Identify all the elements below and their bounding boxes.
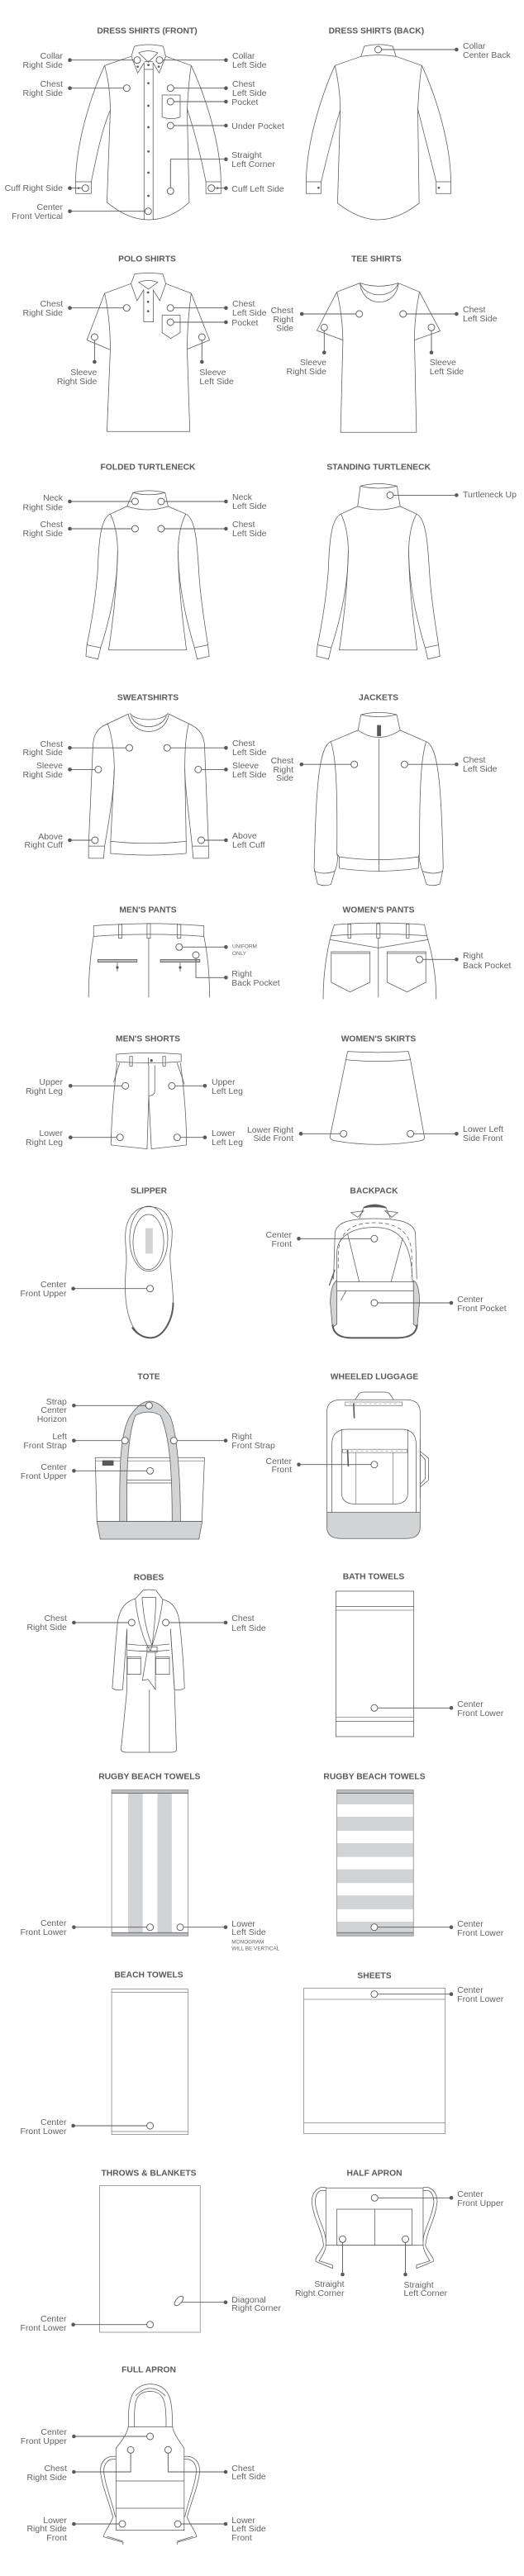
callout: diagonal right corner	[173, 2294, 281, 2313]
icon: slipper	[125, 1206, 173, 1338]
callout: center front upper	[20, 1280, 154, 1299]
callout: center front: Front	[271, 1239, 292, 1249]
callout: lower right leg: Right Leg	[26, 1138, 63, 1148]
callout: cuff left side	[208, 184, 284, 194]
panel: tote	[21, 1372, 275, 1539]
callout: straight left corner	[402, 2236, 448, 2298]
callout: collar right side: Right Side	[23, 60, 63, 70]
callout: sleeve right side: Sleeve	[70, 368, 97, 378]
callout: lower left side front	[174, 2516, 266, 2543]
callout: left front strap: Front Strap	[23, 1441, 67, 1451]
callout: center front lower: Front Lower	[457, 1994, 504, 2004]
callout: lower right side front: Right Side	[26, 2524, 67, 2534]
callout: center front: Center	[265, 1230, 293, 1240]
callout: chest left side: Chest	[463, 755, 486, 765]
callout: lower left side: Left Side	[231, 1927, 266, 1937]
callout: strap center horizon: Horizon	[37, 1414, 67, 1424]
callout: chest right side: Chest	[44, 2464, 67, 2474]
callout: lower left side front: Lower Left	[463, 1124, 503, 1134]
callout: neck left side	[158, 492, 267, 511]
callout: chest left side: Chest	[231, 2464, 255, 2474]
callout: strap center horizon	[37, 1397, 152, 1424]
callout: chest right side: Right	[273, 315, 293, 325]
callout: right front strap: Front Strap	[231, 1441, 275, 1451]
callout: above right cuff: Above	[38, 832, 63, 842]
panel: standing turtleneck	[317, 463, 517, 659]
callout: neck right side: Neck	[43, 493, 64, 503]
note: monogram will be vertical: MONOGRAM	[231, 1940, 264, 1946]
callout: right front strap	[170, 1432, 275, 1451]
icon: sheet	[304, 1989, 445, 2134]
callout: right back pocket	[193, 952, 280, 988]
callout: center front lower: Center	[40, 2314, 67, 2324]
heading: dress shirts back: DRESS SHIRTS (BACK)	[329, 26, 424, 36]
callout: uniform only	[176, 943, 257, 957]
callout: chest right side: Chest	[40, 299, 63, 309]
callout: chest right side: Chest	[40, 79, 63, 89]
heading: women's skirts: WOMEN'S SKIRTS	[341, 1034, 416, 1043]
callout: chest left side	[164, 739, 267, 758]
callout: under pocket	[167, 121, 284, 131]
heading: tee shirts: TEE SHIRTS	[351, 255, 402, 264]
callout: neck right side: Right Side	[23, 502, 63, 512]
garment: standing turtleneck	[317, 483, 440, 659]
callout: pocket	[167, 318, 258, 328]
callout: center front lower: Front Lower	[20, 1927, 67, 1937]
callout: lower left side front: Left Side	[231, 2524, 266, 2534]
callout: center front upper	[21, 1462, 154, 1481]
garment: tee shirt	[317, 283, 441, 432]
callout: upper right leg	[26, 1077, 129, 1096]
callout: chest left side	[400, 305, 498, 324]
callout: center front upper: Front Upper	[20, 1289, 67, 1299]
icon: backpack	[329, 1205, 420, 1338]
heading: jackets: JACKETS	[359, 693, 398, 702]
callout: sleeve left side: Left Side	[199, 377, 234, 387]
callout: pocket: Pocket	[231, 97, 258, 107]
callout: chest left side	[164, 2446, 266, 2482]
panel: sweatshirts	[23, 693, 267, 858]
callout: upper left leg	[169, 1077, 243, 1096]
icon: throw blanket	[100, 2186, 200, 2332]
callout: center front upper: Front Upper	[21, 2436, 67, 2446]
heading: polo shirts: POLO SHIRTS	[118, 255, 176, 264]
callout: chest right side: Chest	[271, 306, 293, 316]
callout: neck right side	[23, 493, 138, 512]
callout: right back pocket: Right	[463, 951, 484, 961]
callout: center front upper: Front Upper	[21, 1471, 67, 1481]
callout: chest right side: Chest	[40, 520, 63, 530]
icon: bath towel	[336, 1591, 414, 1737]
garment: men's pants	[88, 924, 210, 997]
callout: collar right side: Collar	[40, 51, 63, 61]
callout: chest right side: Right Side	[23, 529, 63, 539]
panel: women's skirts	[247, 1034, 503, 1144]
callout: chest left side: Left Side	[232, 88, 267, 98]
callout: upper left leg: Left Leg	[212, 1086, 243, 1096]
callout: center front: Center	[265, 1457, 293, 1466]
callout: chest right side: Right Side	[23, 748, 63, 758]
callout: sleeve left side: Sleeve	[430, 358, 456, 368]
garment: dress shirt front	[75, 45, 221, 220]
callout: chest right side	[271, 756, 358, 783]
callout: chest left side: Left Side	[463, 764, 498, 774]
heading: half apron: HALF APRON	[346, 2170, 403, 2179]
callout: center front upper: Front Upper	[457, 2198, 504, 2208]
callout: chest left side: Chest	[231, 1614, 255, 1623]
panel: sheets	[304, 1972, 504, 2134]
callout: lower left side front	[407, 1124, 503, 1143]
panel: men's shorts	[26, 1034, 243, 1149]
callout: lower right side front: Lower Right	[247, 1125, 293, 1135]
panel: folded turtleneck	[23, 463, 267, 659]
callout: straight left corner	[167, 150, 275, 194]
garment: folded turtleneck	[86, 491, 209, 659]
callout: left front strap: Left	[52, 1432, 67, 1442]
callout: straight left corner: Left Corner	[403, 2288, 448, 2298]
callout: straight left corner: Straight	[403, 2280, 434, 2290]
icon: rugby towel with vertical stripes	[112, 1790, 188, 1936]
callout: pocket	[167, 97, 258, 107]
heading: rugby beach towels: RUGBY BEACH TOWELS	[323, 1773, 426, 1782]
callout: center front: Front	[271, 1465, 292, 1475]
callout: chest right side	[26, 2446, 134, 2483]
heading: rugby beach towels: RUGBY BEACH TOWELS	[98, 1773, 201, 1782]
heading: dress shirts front: DRESS SHIRTS (FRONT)	[97, 26, 198, 36]
callout: center front	[265, 1457, 378, 1475]
callout: center front upper: Center	[40, 1280, 67, 1290]
callout: collar right side	[23, 51, 141, 70]
callout: center front lower	[371, 1985, 504, 2004]
callout: center front upper	[21, 2427, 154, 2446]
panel: full apron	[21, 2366, 266, 2545]
garment: men's shorts	[111, 1053, 187, 1149]
callout: chest right side: Chest	[40, 739, 63, 749]
panel: rugby beach towels horizontal stripes	[323, 1773, 504, 1938]
callout: above left cuff: Above	[232, 831, 257, 841]
callout: chest right side	[23, 739, 132, 758]
callout: chest left side: Left Side	[463, 314, 498, 324]
heading: bath towels: BATH TOWELS	[343, 1573, 404, 1582]
callout: chest left side: Chest	[232, 299, 255, 309]
callout: lower right side front: Side Front	[254, 1134, 293, 1143]
callout: straight right corner: Right Corner	[295, 2288, 345, 2298]
callout: diagonal right corner: Right Corner	[231, 2303, 281, 2313]
callout: chest right side: Right Side	[26, 1623, 67, 1633]
heading: robes: ROBES	[134, 1574, 164, 1583]
icon: wheeled luggage	[327, 1392, 428, 1538]
callout: chest left side: Left Side	[232, 748, 267, 758]
callout: sleeve right side: Right Side	[287, 367, 326, 377]
panel: throws and blankets	[20, 2170, 281, 2333]
callout: above left cuff	[198, 831, 265, 850]
callout: sleeve right side	[23, 761, 102, 780]
heading: slipper: SLIPPER	[131, 1186, 168, 1195]
callout: upper left leg: Upper	[212, 1077, 236, 1087]
callout: chest right side	[271, 306, 363, 334]
callout: center front vertical: Center	[36, 202, 64, 212]
callout: center front vertical	[12, 202, 151, 221]
callout: chest left side: Chest	[232, 79, 255, 89]
callout: chest right side: Side	[276, 324, 293, 334]
heading: beach towels: BEACH TOWELS	[114, 1971, 183, 1980]
callout: sleeve left side: Sleeve	[199, 368, 226, 378]
callout: lower right leg	[26, 1129, 123, 1148]
icon: tote bag	[95, 1401, 204, 1539]
callout: above left cuff: Left Cuff	[232, 840, 265, 850]
garment: women's pants	[323, 923, 436, 999]
callout: turtleneck up: Turtleneck Up	[463, 490, 517, 500]
callout: chest right side	[26, 1614, 135, 1633]
callout: chest left side	[163, 1614, 266, 1633]
callout: center front lower: Center	[40, 1918, 67, 1928]
callout: sleeve left side: Left Side	[232, 770, 267, 780]
callout: chest right side: Right Side	[23, 308, 63, 318]
heading: sweatshirts: SWEATSHIRTS	[117, 693, 179, 702]
callout: lower right side front: Lower	[43, 2516, 67, 2526]
callout: center front lower: Center	[40, 2117, 67, 2127]
panel: half apron	[295, 2170, 504, 2298]
callout: straight left corner: Straight	[231, 150, 262, 160]
callout: under pocket: Under Pocket	[231, 121, 284, 131]
panel: men's pants	[88, 905, 280, 997]
callout: right back pocket: Right	[231, 969, 252, 979]
callout: sleeve right side	[57, 334, 98, 387]
callout: chest left side	[167, 79, 267, 98]
callout: center front lower	[20, 2314, 154, 2333]
garment: polo shirt	[87, 273, 210, 431]
heading: sheets: SHEETS	[357, 1972, 392, 1981]
callout: center front pocket: Center	[457, 1295, 484, 1305]
icon: beach towel	[112, 1989, 188, 2135]
callout: chest right side	[23, 299, 130, 318]
callout: lower left leg	[174, 1129, 243, 1148]
callout: sleeve right side	[287, 324, 327, 377]
callout: lower right side front: Front	[46, 2533, 67, 2543]
callout: upper right leg: Right Leg	[26, 1086, 63, 1096]
callout: center front lower: Front Lower	[457, 1928, 504, 1938]
panel: wheeled luggage	[265, 1372, 428, 1538]
callout: center front lower	[20, 1918, 154, 1937]
callout: sleeve left side	[195, 761, 267, 780]
callout: right back pocket	[417, 951, 511, 971]
callout: neck left side: Neck	[232, 492, 253, 502]
heading: throws and blankets: THROWS & BLANKETS	[102, 2170, 197, 2179]
callout: lower left leg: Left Leg	[212, 1138, 243, 1148]
callout: collar left side: Left Side	[232, 60, 267, 70]
garment: dress shirt back	[306, 45, 451, 220]
callout: straight right corner: Straight	[314, 2279, 345, 2289]
callout: collar left side: Collar	[232, 51, 255, 61]
panel: dress shirts front	[5, 26, 284, 221]
callout: sleeve right side: Sleeve	[300, 358, 326, 368]
callout: center front lower: Front Lower	[457, 1709, 504, 1718]
icon: full apron	[100, 2384, 200, 2545]
callout: chest left side: Left Side	[232, 529, 267, 539]
callout: chest right side: Right Side	[23, 88, 63, 98]
callout: center front	[265, 1230, 378, 1249]
callout: center front vertical: Front Vertical	[12, 211, 63, 221]
callout: collar left side	[156, 51, 267, 70]
heading: standing turtleneck: STANDING TURTLENECK	[326, 463, 431, 473]
callout: lower right leg: Lower	[39, 1129, 63, 1138]
panel: slipper	[20, 1186, 173, 1338]
panel: backpack	[265, 1186, 507, 1338]
panel: tee shirts	[271, 255, 498, 432]
heading: tote: TOTE	[137, 1372, 160, 1381]
callout: lower left side	[177, 1919, 266, 1937]
heading: women's pants: WOMEN'S PANTS	[343, 905, 415, 915]
panel: bath towels	[336, 1573, 504, 1737]
callout: strap center horizon: Strap	[46, 1397, 67, 1407]
callout: uniform only: ONLY	[232, 951, 247, 957]
callout: center front lower	[371, 1699, 504, 1718]
callout: center front upper: Center	[40, 2427, 67, 2437]
panel: rugby beach towels vertical stripes	[20, 1773, 280, 1952]
garment: robe	[112, 1590, 184, 1752]
callout: collar center back: Collar	[463, 41, 486, 51]
callout: chest left side	[158, 520, 267, 539]
callout: right back pocket: Back Pocket	[231, 978, 280, 988]
heading: folded turtleneck: FOLDED TURTLENECK	[101, 463, 196, 473]
heading: backpack: BACKPACK	[350, 1186, 398, 1195]
callout: right front strap: Right	[231, 1432, 252, 1442]
callout: sleeve left side	[198, 334, 234, 387]
callout: chest right side: Right Side	[26, 2473, 67, 2483]
callout: lower left side front: Lower	[231, 2516, 255, 2526]
note: monogram will be vertical: WILL BE VERTICAL	[231, 1946, 280, 1952]
panel: robes	[26, 1574, 266, 1752]
callout: center front pocket: Front Pocket	[457, 1304, 507, 1314]
callout: chest left side: Left Side	[231, 2472, 266, 2482]
callout: center front lower: Center	[457, 1985, 484, 1995]
callout: chest left side	[401, 755, 498, 774]
garment: skirt	[330, 1052, 425, 1144]
callout: upper right leg: Upper	[39, 1077, 63, 1087]
callout: neck left side: Left Side	[232, 501, 267, 511]
callout: cuff right side	[5, 183, 88, 193]
callout: strap center horizon: Center	[40, 1405, 67, 1415]
callout: center front upper	[371, 2189, 504, 2208]
callout: lower left side: Lower	[231, 1919, 255, 1929]
callout: collar center back: Center Back	[463, 50, 512, 60]
callout: center front upper: Center	[40, 1462, 67, 1472]
callout: chest right side: Chest	[271, 756, 293, 766]
panel: jackets	[271, 693, 498, 886]
callout: chest left side: Left Side	[232, 308, 267, 318]
callout: center front lower: Front Lower	[20, 2127, 67, 2136]
callout: center front pocket	[371, 1295, 507, 1314]
callout: center front lower: Center	[457, 1919, 484, 1929]
callout: cuff right side: Cuff Right Side	[5, 183, 63, 193]
callout: sleeve left side: Sleeve	[232, 761, 259, 771]
callout: left front strap	[23, 1432, 128, 1451]
callout: sleeve right side: Sleeve	[36, 761, 63, 771]
callout: pocket: Pocket	[231, 318, 258, 328]
callout: lower right side front	[26, 2516, 126, 2543]
callout: above right cuff	[25, 832, 98, 850]
callout: right back pocket: Back Pocket	[463, 961, 511, 971]
callout: center front lower: Center	[457, 1699, 484, 1709]
heading: men's shorts: MEN'S SHORTS	[116, 1034, 180, 1043]
callout: lower left side front: Front	[231, 2533, 252, 2543]
panel: beach towels	[20, 1971, 188, 2136]
callout: center front upper: Center	[457, 2189, 484, 2199]
callout: chest left side: Chest	[232, 739, 255, 749]
garment: jacket	[314, 712, 443, 886]
callout: chest left side: Chest	[232, 520, 255, 530]
heading: wheeled luggage: WHEELED LUGGAGE	[331, 1372, 418, 1381]
callout: center front lower	[20, 2117, 154, 2136]
callout: center front lower	[371, 1919, 504, 1938]
garment: sweatshirt	[88, 713, 208, 858]
callout: chest left side: Left Side	[231, 1623, 266, 1633]
callout: center front lower: Front Lower	[20, 2323, 67, 2333]
callout: straight right corner	[295, 2236, 345, 2298]
callout: sleeve left side: Left Side	[430, 367, 464, 377]
callout: turtleneck up	[387, 490, 517, 500]
callout: straight left corner: Left Corner	[231, 159, 275, 169]
callout: chest right side	[23, 520, 138, 539]
callout: sleeve left side	[428, 324, 464, 377]
panel: polo shirts	[23, 255, 267, 431]
callout: above right cuff: Right Cuff	[25, 840, 63, 850]
icon: rugby towel with horizontal stripes	[337, 1790, 413, 1936]
callout: sleeve right side: Right Side	[57, 377, 97, 387]
callout: lower right side front	[247, 1125, 347, 1143]
callout: uniform only: UNIFORM	[232, 943, 257, 950]
heading: full apron: FULL APRON	[121, 2366, 176, 2375]
callout: chest left side: Chest	[463, 305, 486, 315]
callout: chest right side: Chest	[44, 1614, 67, 1623]
callout: chest right side	[23, 79, 130, 98]
callout: sleeve right side: Right Side	[23, 770, 63, 780]
heading: men's pants: MEN'S PANTS	[119, 905, 177, 915]
icon: half apron	[312, 2188, 437, 2269]
callout: chest right side: Right	[273, 765, 293, 775]
callout: cuff left side: Cuff Left Side	[231, 184, 284, 194]
callout: diagonal right corner: Diagonal	[231, 2295, 266, 2305]
callout: chest right side: Side	[276, 773, 293, 783]
panel: women's pants	[323, 905, 511, 999]
panel: dress shirts back	[306, 26, 512, 220]
callout: chest left side	[167, 299, 267, 318]
callout: lower left side front: Side Front	[463, 1134, 503, 1143]
callout: collar center back	[375, 41, 512, 60]
callout: lower left leg: Lower	[212, 1129, 236, 1138]
